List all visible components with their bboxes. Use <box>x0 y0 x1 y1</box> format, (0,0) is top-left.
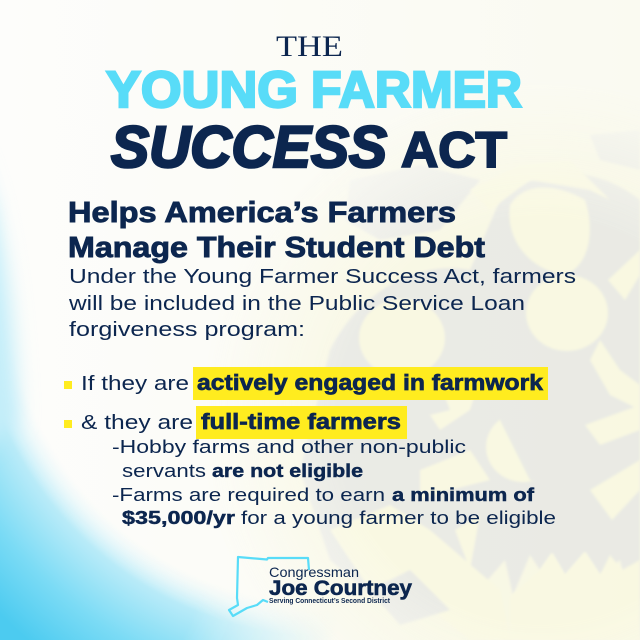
blue corner glow <box>0 406 318 640</box>
title line: act: ACT <box>401 122 507 178</box>
sub-point: hobby farms <box>112 437 466 481</box>
logo: congressman joe courtney: Joe Courtney <box>269 577 412 600</box>
sub-point: minimum earnings: -Farms are required to earn <box>112 485 385 505</box>
bullet: actively engaged in farmwork: If they are <box>81 373 189 395</box>
intro paragraph: will be included in the Public Service Loan <box>68 293 525 315</box>
intro paragraph: Under the Young Farmer Success Act, farmers <box>69 266 576 288</box>
intro paragraph: forgiveness program: <box>69 319 305 341</box>
sub-point: minimum earnings <box>112 485 556 528</box>
subheading <box>68 197 485 264</box>
subheading: Manage Their Student Debt <box>68 232 485 264</box>
bullet: actively engaged in farmwork: actively engaged in farmwork <box>197 370 544 395</box>
sub-point: hobby farms: -Hobby farms and other non-public <box>112 437 466 457</box>
title line: the: THE <box>276 30 343 63</box>
logo text: Congressman <box>269 564 359 580</box>
bullet: full-time farmers: & they are <box>81 412 193 434</box>
sub-point: hobby farms: are not eligible <box>212 461 363 481</box>
bullet: full-time farmers <box>64 406 407 439</box>
logo: congressman joe courtney <box>229 557 412 616</box>
background photo: apples and leaves <box>264 156 640 640</box>
intro paragraph <box>68 266 576 341</box>
sub-point: minimum earnings: a minimum of <box>392 485 535 505</box>
subheading: Helps America’s Farmers <box>68 197 456 229</box>
bullet: actively engaged in farmwork <box>64 367 548 400</box>
title <box>106 30 522 180</box>
title line: young farmer: YOUNG <box>106 61 298 118</box>
title line: young farmer: FARMER <box>311 61 522 118</box>
logo: congressman joe courtney: Serving Connecticut’s Second District <box>269 598 391 605</box>
title line: young farmer <box>106 61 522 118</box>
leaf shadows <box>378 400 560 623</box>
title line: success: SUCCESS <box>111 115 387 180</box>
apples <box>330 160 640 640</box>
bullet: full-time farmers: full-time farmers <box>201 409 401 434</box>
sub-point: minimum earnings: $35,000/yr <box>122 508 235 528</box>
icon: connecticut outline <box>229 557 309 616</box>
sub-point: minimum earnings: for a young farmer to be eligible <box>241 508 556 528</box>
sub-point: hobby farms: servants <box>122 461 206 481</box>
pale blue left edge <box>0 140 18 460</box>
